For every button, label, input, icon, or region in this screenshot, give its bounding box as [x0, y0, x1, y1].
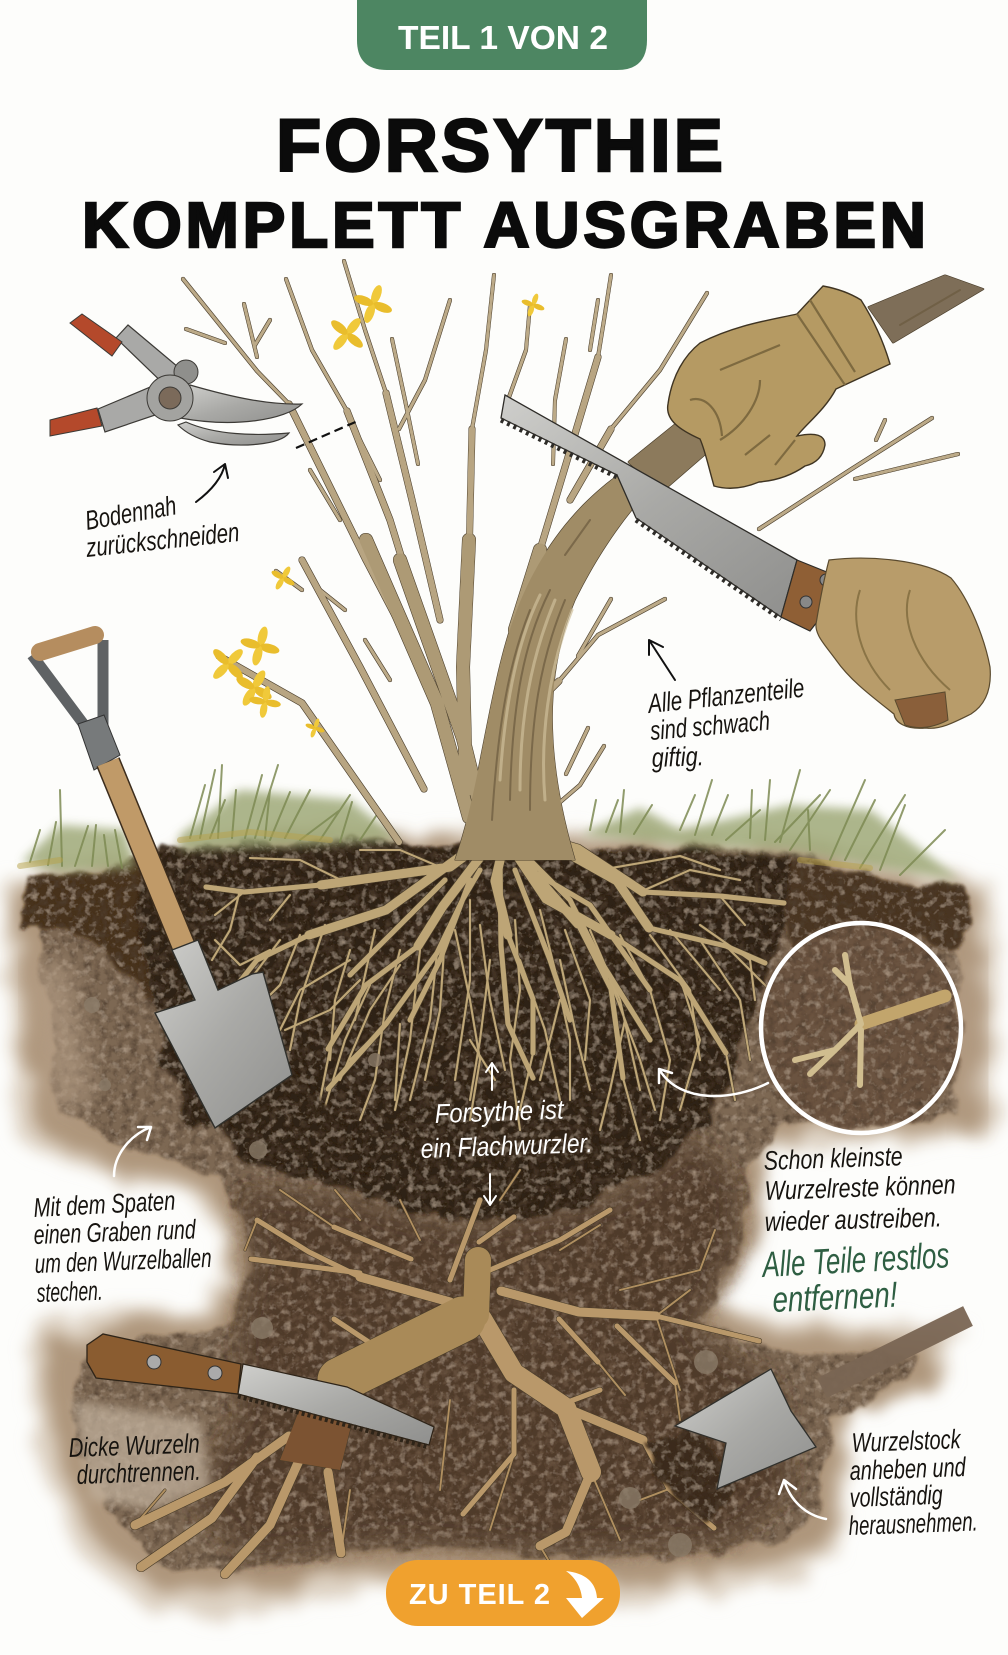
dark trench around root ball: [138, 842, 791, 1220]
upper root system: [206, 830, 784, 1140]
note: shallow-rooted: Forsythie ist: [434, 1094, 565, 1129]
note: shallow-rooted: [420, 1063, 593, 1205]
note: dig trench with spade: stechen.: [36, 1276, 103, 1308]
note: smallest root remains resprout: [659, 1069, 956, 1320]
icon: pruning shears: [50, 314, 302, 445]
title line one: FORSYTHIE: [276, 104, 723, 187]
note: cut thick roots: Dicke Wurzeln: [68, 1428, 200, 1463]
button: to part 2: ZU TEIL 2: [409, 1579, 550, 1611]
note: cut thick roots: durchtrennen.: [76, 1456, 201, 1490]
grass tufts: [20, 765, 960, 880]
note: dig trench with spade: um den Wurzelballen: [34, 1243, 212, 1279]
icon: spade: [32, 635, 292, 1128]
lifted soil mound by spade: [225, 1060, 380, 1170]
shrub stems: [183, 261, 984, 860]
note: dig trench with spade: [33, 1127, 212, 1308]
icon: hand shovel: [675, 1316, 968, 1489]
note: dig trench with spade: Mit dem Spaten: [33, 1186, 176, 1223]
note: smallest root remains resprout: entfernen!: [772, 1274, 898, 1320]
title line two: KOMPLETT AUSGRABEN: [82, 189, 926, 261]
callout circle: root remnant: [761, 923, 961, 1133]
note: smallest root remains resprout: Wurzelreste können: [764, 1169, 956, 1206]
badge: part 1 of 2: [357, 0, 647, 70]
note: lift rootstock: [779, 1424, 978, 1541]
note: lift rootstock: vollständig: [849, 1480, 943, 1513]
note: cut near ground: Bodennah: [83, 490, 179, 536]
note: smallest root remains resprout: Schon kleinste: [763, 1141, 903, 1176]
bark detail on main trunk: [492, 290, 960, 820]
note: smallest root remains resprout: wieder austreiben.: [764, 1202, 942, 1237]
note: slightly poisonous: [645, 640, 806, 773]
note: lift rootstock: anheben und: [849, 1452, 967, 1486]
note: shallow-rooted: ein Flachwurzler.: [420, 1128, 593, 1164]
icon: curved down arrow: [566, 1571, 604, 1618]
soil mound by hand shovel: [640, 1430, 740, 1525]
note: cut near ground: [83, 464, 241, 563]
dashed cut line: [296, 420, 360, 448]
badge: part 1 of 2: TEIL 1 VON 2: [398, 19, 608, 56]
icon: lower glove: [816, 558, 990, 728]
note: slightly poisonous: Alle Pflanzenteile: [645, 673, 806, 719]
flowers: [200, 278, 548, 741]
icon: pruning saw in root: [87, 1334, 434, 1447]
bark highlights: [500, 595, 572, 800]
rocks: [84, 997, 718, 1557]
note: slightly poisonous: sind schwach: [649, 706, 771, 746]
note: cut near ground: zurückschneiden: [84, 517, 241, 563]
soil cross-section: [6, 828, 996, 1612]
icon: upper glove: [668, 286, 890, 488]
note: slightly poisonous: giftig.: [651, 741, 704, 773]
lower root system: [135, 1170, 759, 1580]
button: to part 2: [386, 1560, 620, 1626]
note: cut thick roots: [68, 1428, 201, 1490]
icon: hand saw: [501, 395, 849, 631]
note: lift rootstock: Wurzelstock: [851, 1424, 962, 1458]
note: dig trench with spade: einen Graben rund: [33, 1214, 197, 1250]
